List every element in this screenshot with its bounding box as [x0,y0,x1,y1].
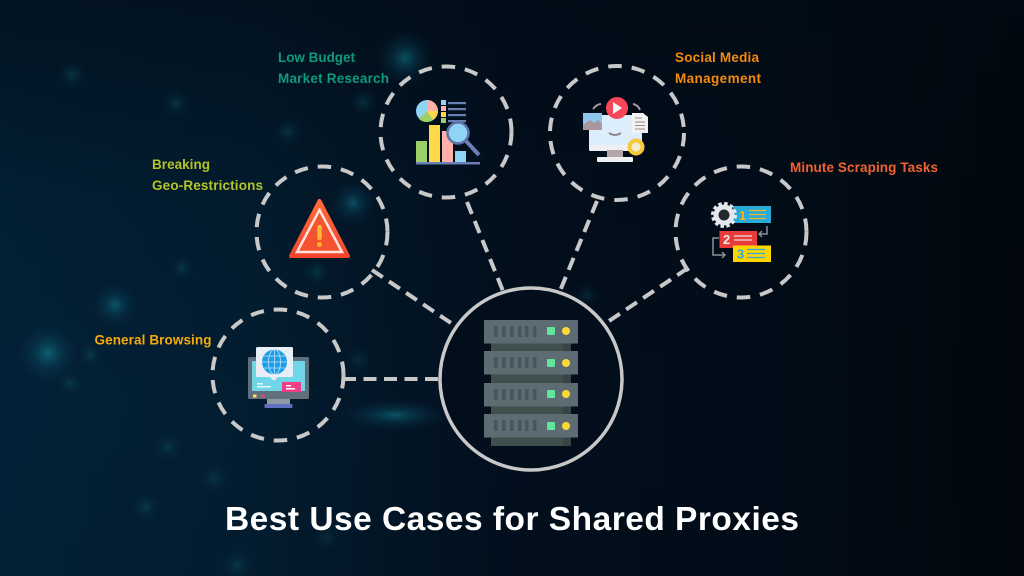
circle: general browsing [212,310,344,440]
icon: server rack [484,320,578,446]
icon: charts and magnifier [416,100,480,164]
label: social media management [675,50,762,86]
label: social media management: Management [675,71,762,86]
circle: geo restrictions [256,166,388,298]
icon: computer with globe [248,347,309,408]
label: low budget market research: Low Budget [278,50,356,65]
label: low budget market research [278,50,389,86]
icon: warning triangle [291,201,348,256]
label: minute scraping tasks: Minute Scraping Tasks [790,160,938,175]
circle: minute scraping [676,166,806,298]
circle: social media [550,66,684,200]
central circle [440,288,622,470]
icon: numbered task list: 1 [739,208,746,223]
circle: low budget [380,66,512,198]
title: Best Use Cases for Shared Proxies [225,501,799,538]
label: breaking geo-restrictions: Breaking [152,157,210,172]
icon: numbered task list: 2 [723,232,730,247]
icon: social media monitor [583,97,648,162]
connector lines [343,201,688,379]
icon: numbered task list: 3 [737,246,744,262]
label: low budget market research: Market Research [278,71,389,86]
label: general browsing: General Browsing [94,332,212,348]
label: social media management: Social Media [675,50,759,65]
label: breaking geo-restrictions [152,157,263,193]
label: breaking geo-restrictions: Geo-Restrictions [152,178,263,193]
icon: numbered task list [712,204,771,262]
